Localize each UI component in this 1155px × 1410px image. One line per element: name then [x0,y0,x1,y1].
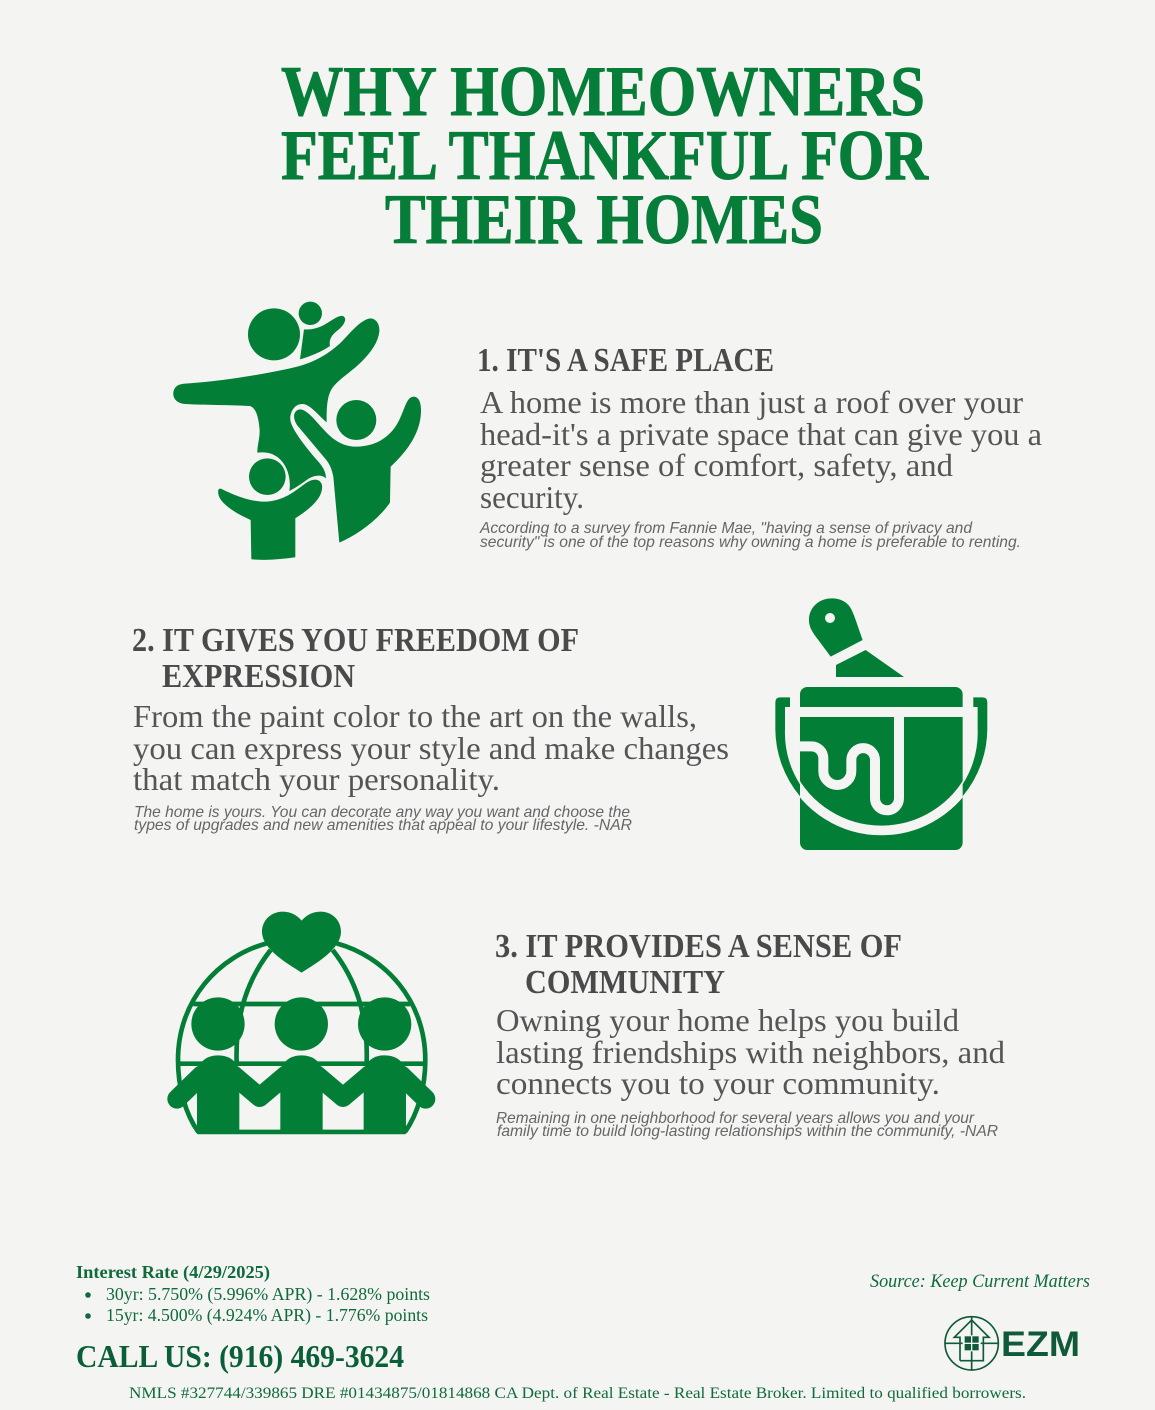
note: NAR neighborhood: Remaining in one neighborhood for several years allows you and your [496,1110,975,1127]
note: NAR home decoration: The home is yours. You can decorate any way you want and choose the [134,804,630,821]
section 2 text [132,622,729,834]
heading: sense of community: COMMUNITY [525,964,725,1001]
title [281,53,929,259]
logo house emblem [945,1317,998,1370]
heading: sense of community [495,928,902,1001]
title: THEIR HOMES [385,181,823,259]
bullet list of rates: 30yr: 5.750% (5.996% APR) - 1.628% points [106,1284,430,1305]
body: freedom of expression: From the paint color to the art on the walls, [133,698,697,734]
bullet list of rates: 15yr: 4.500% (4.924% APR) - 1.776% points [106,1305,428,1326]
heading: freedom of expression [132,622,579,695]
body: sense of community [496,1002,1005,1101]
title: FEEL THANKFUL FOR [281,117,929,195]
heading: safe place: 1. IT'S A SAFE PLACE [477,342,774,379]
title: WHY HOMEOWNERS [281,53,925,131]
interest rates [76,1262,430,1326]
body: safe place: security. [480,479,584,515]
heading: sense of community: 3. IT PROVIDES A SENSE OF [495,928,902,965]
call to action phone: CALL US: (916) 469-3624 [76,1338,404,1374]
body: safe place: greater sense of comfort, safety, and [480,447,953,483]
heading: freedom of expression: 2. IT GIVES YOU FREEDOM OF [132,622,579,659]
interest rate heading: Interest Rate (4/29/2025) [76,1262,270,1283]
note: Fannie Mae survey: security" is one of the top reasons why owning a home is preferable to renting. [480,534,1021,551]
body: sense of community: connects you to your community. [496,1065,940,1101]
icon: family with raised arms [173,302,421,560]
body: freedom of expression: that match your personality. [133,761,500,797]
section 1 text [477,342,1042,551]
note: NAR home decoration: types of upgrades and new amenities that appeal to your lifestyle. -NAR [134,817,632,834]
section 3 text [495,928,1005,1140]
body: sense of community: lasting friendships with neighbors, and [496,1034,1005,1070]
licensing disclaimer: NMLS #327744/339865 DRE #01434875/01814868 CA Dept. of Real Estate - Real Estate Broker. Limited to qualified borrowers. [129,1385,1026,1402]
body: safe place [480,384,1042,515]
body: freedom of expression [133,698,729,797]
bullet list of rates [85,1284,430,1326]
note: Fannie Mae survey: According to a survey from Fannie Mae, "having a sense of privacy and [479,520,973,537]
note: NAR home decoration [134,804,632,834]
note: Fannie Mae survey [479,520,1021,551]
logo wordmark: EZM [1001,1325,1080,1364]
heading: freedom of expression: EXPRESSION [162,658,355,695]
logo: EZM [945,1317,1080,1370]
icon: paint bucket and scraper [775,598,987,850]
icon: community globe with heart [177,912,426,1134]
body: safe place: A home is more than just a roof over your [480,384,1023,420]
body: freedom of expression: you can express your style and make changes [133,730,729,766]
body: sense of community: Owning your home helps you build [496,1002,959,1038]
body: safe place: head-it's a private space that can give you a [480,416,1042,452]
note: NAR neighborhood [496,1110,998,1140]
note: NAR neighborhood: family time to build long-lasting relationships within the community, -NAR [497,1123,998,1140]
source credit: Source: Keep Current Matters [870,1271,1090,1292]
